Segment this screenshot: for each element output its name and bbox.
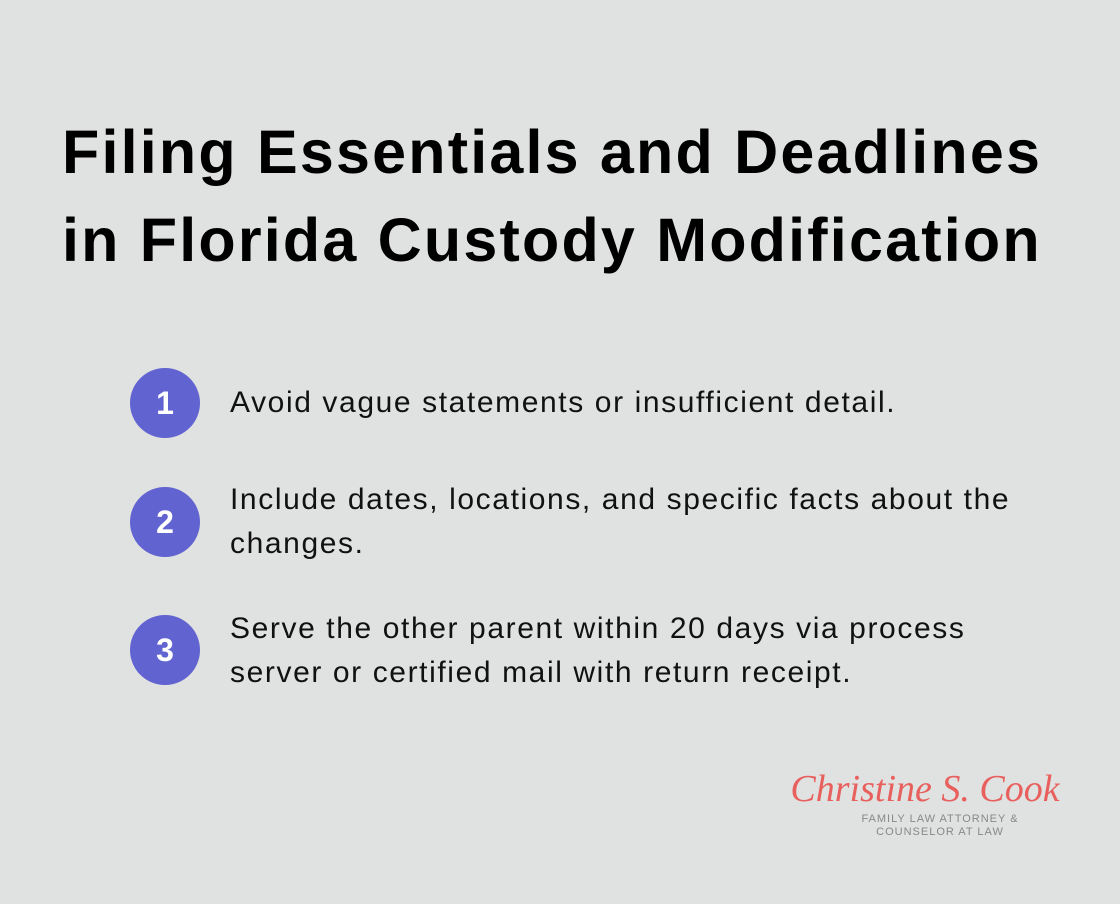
text 2: Include dates, locations, and specific facts about the changes. bbox=[230, 483, 1010, 560]
logo bbox=[790, 768, 1060, 838]
text 1: Avoid vague statements or insufficient detail. bbox=[230, 386, 896, 419]
logo subtitle: FAMILY LAW ATTORNEY & bbox=[861, 813, 1019, 825]
badge 1 bbox=[130, 368, 200, 438]
step 2 bbox=[130, 483, 1010, 560]
text 3: server or certified mail with return receipt. bbox=[230, 656, 852, 689]
badge 3: 3 bbox=[156, 632, 174, 668]
badge 1: 1 bbox=[156, 385, 174, 421]
badge 2 bbox=[130, 487, 200, 557]
title: in Florida Custody Modification bbox=[62, 206, 1042, 274]
badge 3 bbox=[130, 615, 200, 685]
title bbox=[62, 118, 1042, 274]
badge 2: 2 bbox=[156, 504, 174, 540]
step 3 bbox=[130, 612, 965, 689]
logo subtitle bbox=[861, 813, 1019, 838]
text 3: Serve the other parent within 20 days via process bbox=[230, 612, 965, 645]
logo subtitle: COUNSELOR AT LAW bbox=[876, 826, 1004, 838]
title: Filing Essentials and Deadlines bbox=[62, 118, 1042, 186]
text 3 bbox=[230, 612, 965, 689]
step 1 bbox=[130, 368, 896, 438]
logo script name: Christine S. Cook bbox=[790, 768, 1060, 810]
